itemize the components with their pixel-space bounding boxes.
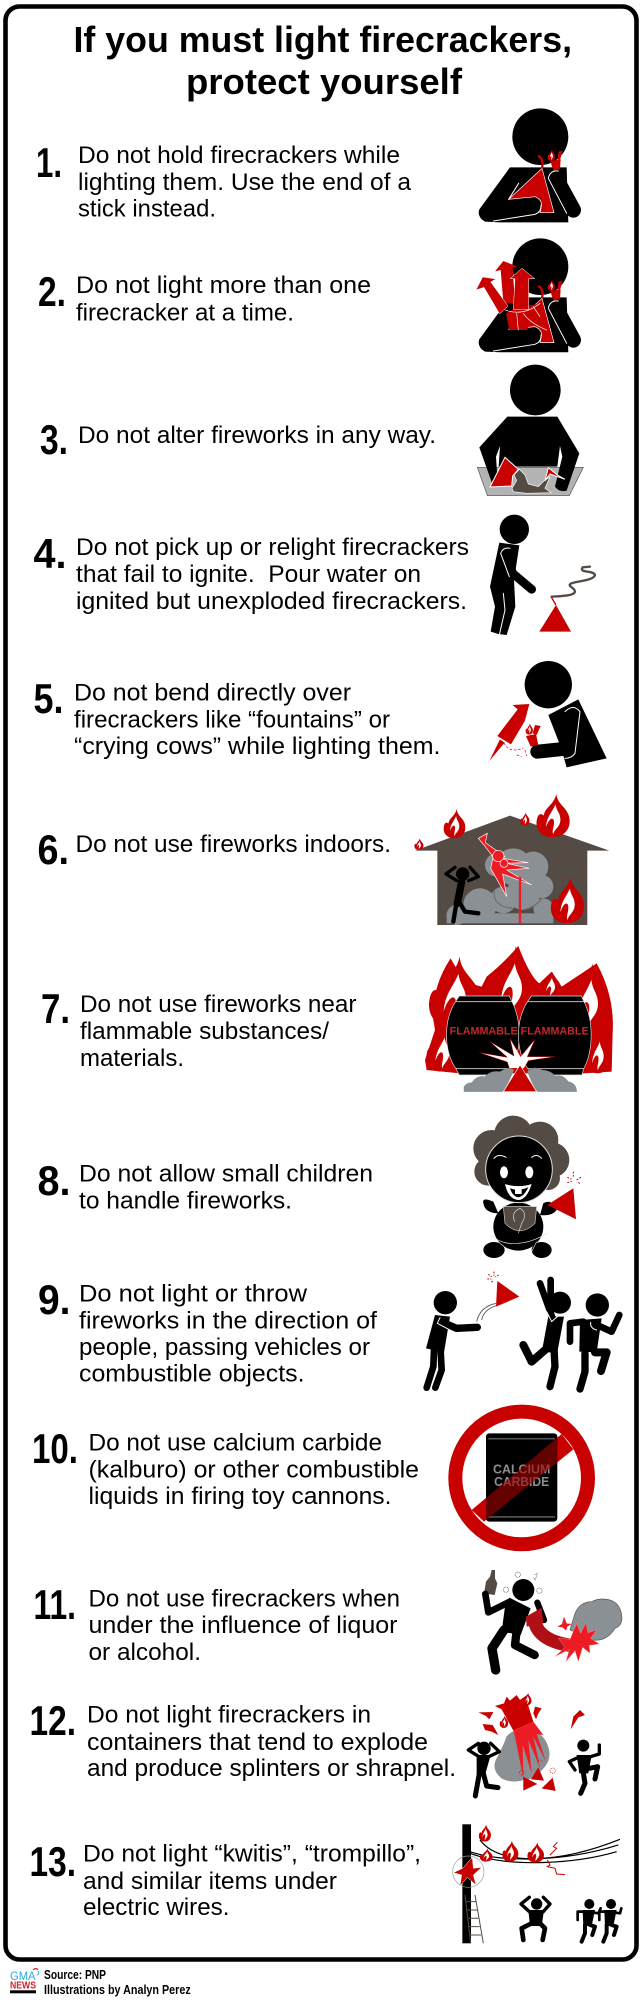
item 8: [38, 1116, 581, 1258]
item 9: [38, 1272, 619, 1389]
number 2: 2.: [38, 268, 66, 315]
icon: flammable barrels on fire: [425, 946, 613, 1092]
text block 11: under the influence of liquor: [88, 1612, 398, 1639]
item 7: [41, 946, 613, 1092]
text block 10: [88, 1430, 419, 1510]
number 1: 1.: [36, 139, 62, 186]
text block 13: and similar items under: [83, 1868, 337, 1895]
item 11: [34, 1570, 622, 1670]
text block 7: [80, 991, 356, 1072]
text block 9: people, passing vehicles or: [79, 1334, 370, 1361]
footer: GMA News logo: NEWS: [10, 1980, 36, 1992]
text block 5: [74, 680, 440, 760]
text block 5: Do not bend directly over: [74, 680, 351, 706]
number 6: 6.: [38, 826, 69, 873]
icon: person throwing firework at people: [426, 1272, 619, 1389]
number 8: 8.: [38, 1157, 70, 1204]
icon: person holding firecracker in hand: [479, 108, 573, 222]
text block 11: or alcohol.: [88, 1639, 201, 1666]
text block 8: to handle fireworks.: [79, 1188, 292, 1214]
item 2: [38, 238, 573, 352]
title: protect yourself: [186, 61, 463, 102]
text block 9: combustible objects.: [79, 1360, 304, 1388]
item 4: [34, 515, 595, 635]
item 10: [32, 1412, 588, 1544]
footer: credits: Source: PNP: [44, 1968, 106, 1982]
icon: calcium carbide prohibited sign: CALCIUM: [493, 1462, 550, 1476]
number 12: 12.: [30, 1697, 76, 1744]
title: If you must light firecrackers,: [74, 19, 572, 60]
text block 7: Do not use fireworks near: [80, 991, 356, 1018]
number 11: 11.: [34, 1581, 76, 1628]
text block 10: liquids in firing toy cannons.: [88, 1483, 392, 1510]
text block 10: Do not use calcium carbide: [88, 1430, 382, 1456]
footer: GMA News logo: [10, 1968, 39, 1993]
icon: person altering fireworks over tray: [477, 365, 583, 496]
text block 4: ignited but unexploded firecrackers.: [76, 588, 467, 615]
item 6: [38, 794, 609, 925]
text block 7: materials.: [80, 1045, 184, 1072]
item 3: [40, 365, 583, 496]
icon: exploding container with shrapnel: [468, 1693, 599, 1796]
icon: drunk person with firecracker: [484, 1570, 622, 1670]
text block 12: containers that tend to explode: [87, 1729, 428, 1756]
text block 8: [79, 1160, 373, 1214]
text block 1: Do not hold firecrackers while: [78, 142, 400, 169]
text block 7: flammable substances/: [80, 1018, 329, 1045]
item 12: [30, 1693, 599, 1796]
text block 1: [78, 142, 412, 222]
item 5: [34, 661, 607, 767]
icon: flammable barrels on fire: FLAMMABLE: [450, 1026, 518, 1038]
icon: person bending over fountain firecracker: [489, 661, 607, 767]
footer: GMA News logo: GMA: [10, 1971, 36, 1983]
text block 4: that fail to ignite. Pour water on: [76, 561, 421, 588]
text block 4: [76, 534, 469, 615]
text block 12: and produce splinters or shrapnel.: [87, 1755, 456, 1782]
number 5: 5.: [34, 675, 64, 722]
text block 4: Do not pick up or relight firecrackers: [76, 534, 469, 561]
text block 1: stick instead.: [78, 196, 216, 222]
text block 3: Do not alter fireworks in any way.: [78, 422, 436, 449]
icon: burning house with firework indoors: [414, 794, 609, 925]
text block 13: electric wires.: [83, 1894, 230, 1921]
text block 9: [79, 1280, 377, 1388]
text block 9: fireworks in the direction of: [79, 1308, 377, 1334]
icon: person lighting several rockets: [476, 238, 573, 352]
icon: calcium carbide prohibited sign: CARBIDE: [494, 1475, 549, 1489]
icon: calcium carbide prohibited sign: [455, 1412, 588, 1544]
text block 1: lighting them. Use the end of a: [78, 169, 412, 196]
text block 11: Do not use firecrackers when: [88, 1586, 400, 1612]
text block 11: [88, 1586, 400, 1666]
icon: electric post with burning wires: [453, 1824, 621, 1943]
number 9: 9.: [38, 1276, 70, 1323]
text block 12: Do not light firecrackers in: [87, 1702, 371, 1728]
text block 10: (kalburo) or other combustible: [88, 1456, 419, 1484]
text block 8: Do not allow small children: [79, 1160, 373, 1188]
text block 9: Do not light or throw: [79, 1280, 308, 1308]
icon: flammable barrels on fire: FLAMMABLE: [521, 1026, 589, 1038]
text block 13: [83, 1840, 421, 1921]
footer: credits: Illustrations by Analyn Perez: [44, 1983, 191, 1997]
number 10: 10.: [32, 1425, 78, 1472]
number 4: 4.: [34, 530, 66, 577]
text block 12: [87, 1702, 456, 1782]
text block 6: Do not use fireworks indoors.: [76, 831, 391, 858]
text block 5: “crying cows” while lighting them.: [74, 733, 440, 760]
text block 13: Do not light “kwitis”, “trompillo”,: [83, 1840, 421, 1868]
number 13: 13.: [30, 1838, 76, 1885]
text block 2: firecracker at a time.: [76, 300, 294, 326]
icon: small child holding firework: [473, 1116, 581, 1258]
item 1: [36, 108, 573, 222]
title: [74, 19, 572, 102]
item 13: [30, 1824, 621, 1943]
text block 5: firecrackers like “fountains” or: [74, 706, 390, 734]
number 3: 3.: [40, 416, 68, 463]
number 7: 7.: [41, 985, 70, 1032]
footer: credits: [44, 1968, 191, 1997]
text block 2: [76, 272, 371, 326]
text block 2: Do not light more than one: [76, 272, 371, 299]
icon: person approaching unexploded firecracker: [490, 515, 595, 635]
